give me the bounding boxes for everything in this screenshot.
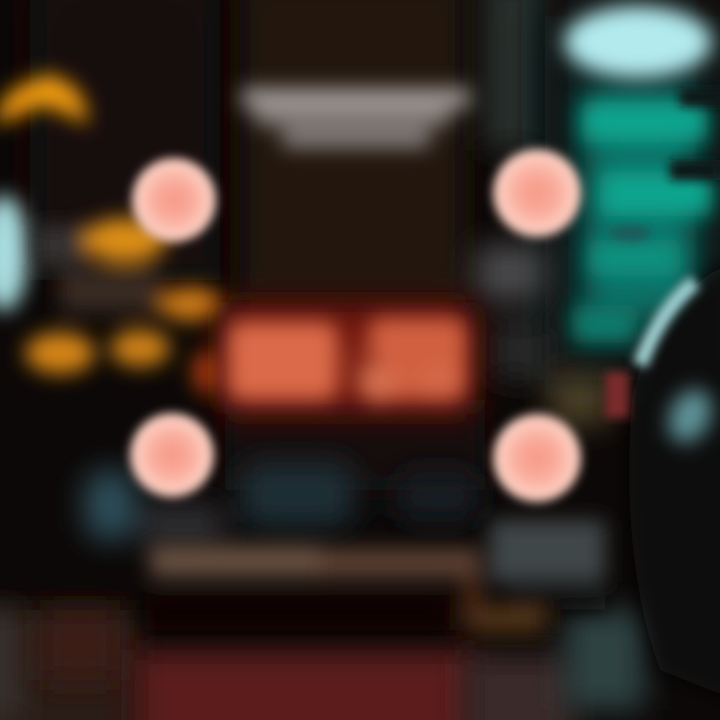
orange arc icon top left [0,75,88,125]
table [145,520,605,633]
dark teal items under numbers [85,462,480,545]
cyan ellipse top right [564,6,712,78]
teal text column on the right [572,88,720,343]
big red number block [228,318,466,403]
pink circle top right [493,149,581,237]
pink circle bottom right [493,414,581,502]
cyan blob left [0,195,28,311]
grey labels on the right [475,245,610,425]
dark object foreground right [605,260,720,700]
grey text block at top centre [242,88,470,148]
red glow behind numbers [218,302,476,414]
orange labels on the left [25,218,224,394]
floor [0,610,645,720]
pink circle top left [132,158,216,242]
pink circle bottom left [130,413,214,497]
